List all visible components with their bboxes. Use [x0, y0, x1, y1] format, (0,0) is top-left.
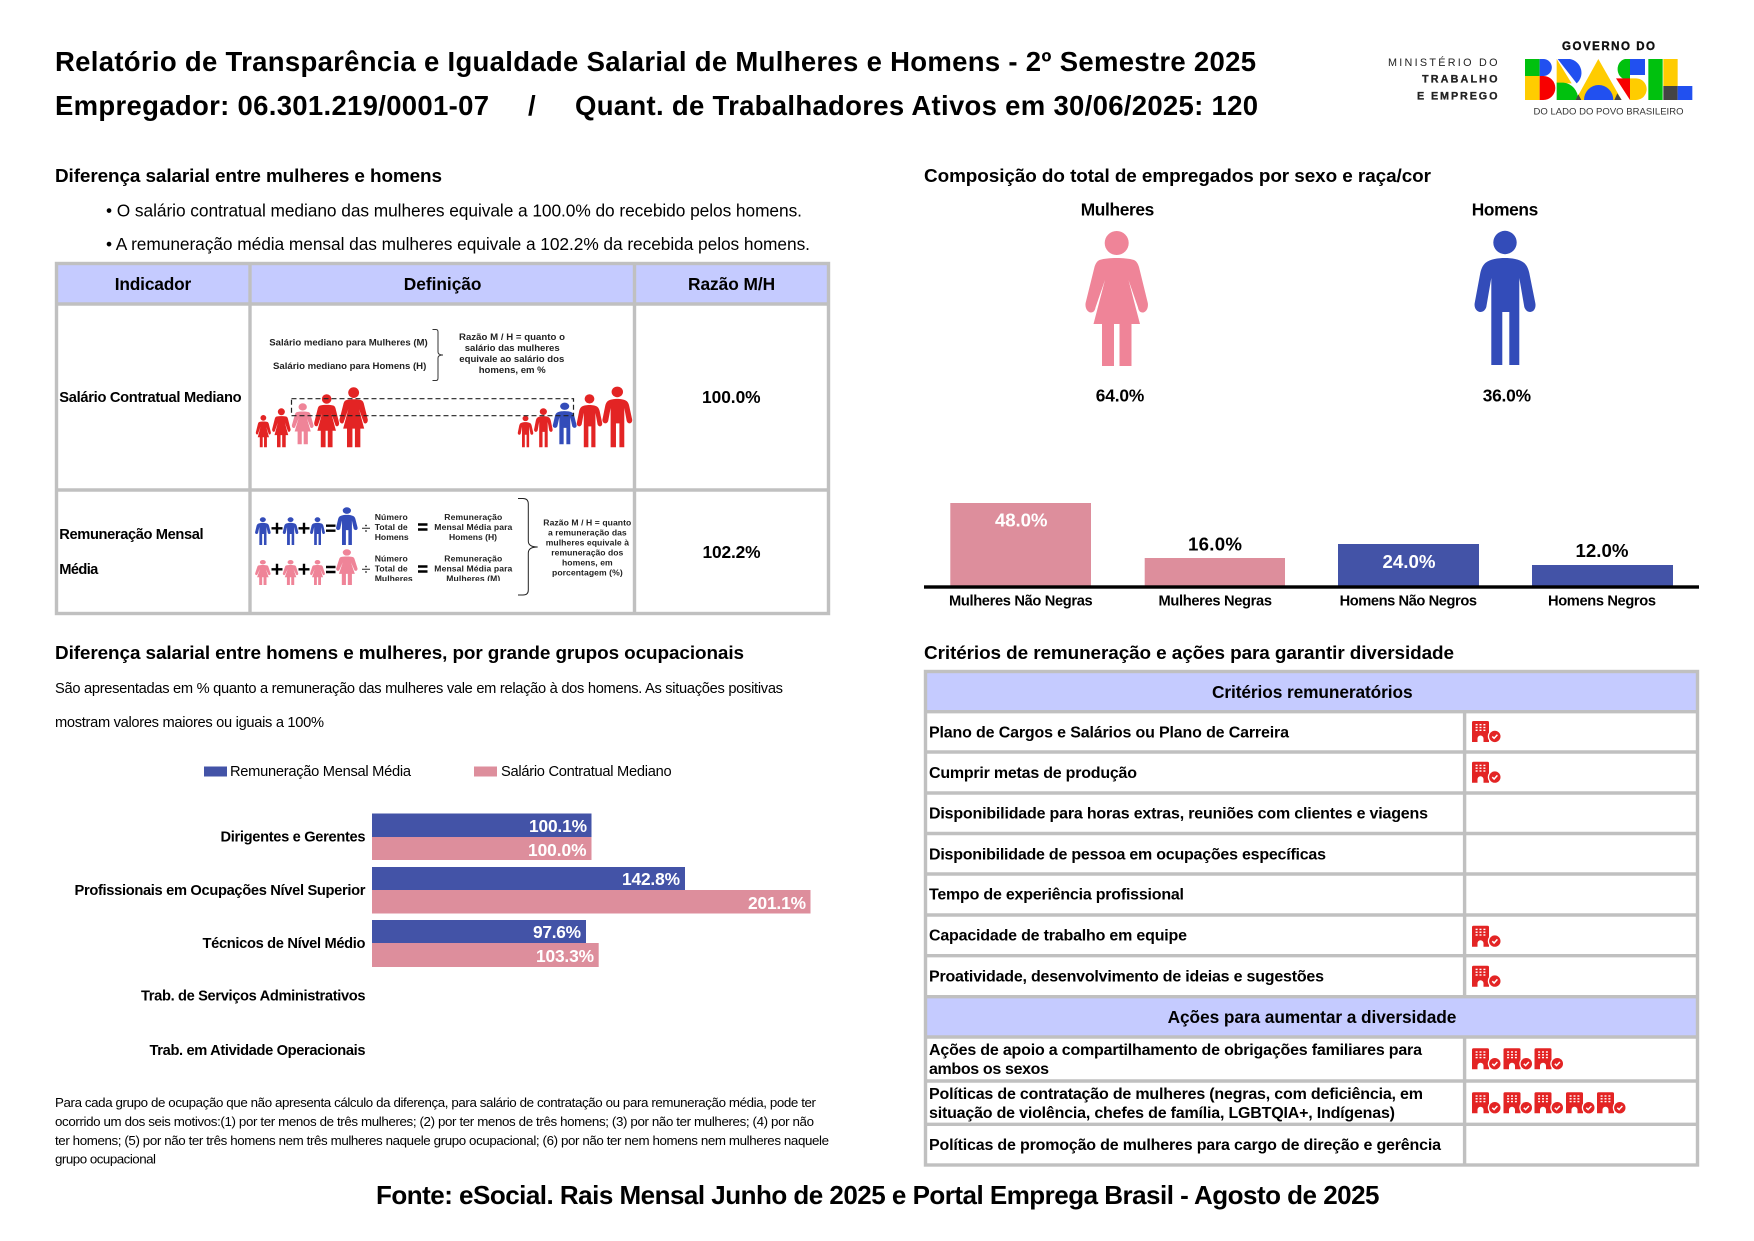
title — [55, 46, 1258, 121]
panel: composição — [924, 166, 1699, 610]
row: plano de cargos: Plano de Cargos e Salários ou Plano de Carreira — [929, 725, 1289, 742]
label: homens: Homens — [1472, 200, 1538, 220]
diagram: salário mediano: Salário mediano para Homens (H) — [273, 361, 426, 372]
diagram: salário mediano — [256, 330, 632, 447]
panel: grupos ocupacionais — [55, 643, 829, 1166]
diagram: remuneração média: Mensal Média para — [434, 564, 513, 574]
value: mulheres: 64.0% — [1096, 386, 1144, 406]
text: explicação: mostram valores maiores ou iguais a 100% — [55, 715, 324, 731]
label: mulheres: Mulheres — [1081, 200, 1154, 220]
row: horas extras: Disponibilidade para horas extras, reuniões com clientes e viagens — [929, 806, 1428, 822]
diagram: remuneração média: Número — [375, 554, 408, 564]
logo: governo do brasil — [1525, 41, 1692, 118]
bar chart: razão por ocupação: 100.0% — [528, 840, 586, 860]
diagram: salário mediano: Salário mediano para Mulheres (M) — [269, 338, 428, 349]
diagram: remuneração média: Homens (H) — [449, 532, 497, 542]
diagram: remuneração média: Número — [375, 512, 408, 522]
row: proatividade: Proatividade, desenvolvimento de ideias e sugestões — [929, 969, 1324, 986]
logo: governo do brasil: DO LADO DO POVO BRASILEIRO — [1534, 107, 1684, 118]
diagram: remuneração média: Total de — [375, 564, 408, 574]
bar chart: razão por ocupação: 97.6% — [533, 922, 581, 942]
bar chart: razão por ocupação: Profissionais em Ocupações Nível Superior — [74, 883, 366, 899]
diagram: remuneração média: Mulheres — [375, 574, 413, 584]
bar chart: razão por ocupação: 201.1% — [748, 893, 806, 913]
title: Empregador: 06.301.219/0001-07 — [55, 90, 489, 121]
bar chart: sexo e raça: Homens Negros — [1548, 594, 1656, 610]
bar chart: razão por ocupação: 100.1% — [529, 816, 587, 836]
heading: critérios: Critérios de remuneração e ações para garantir diversidade — [924, 643, 1454, 664]
row: metas — [929, 762, 1502, 784]
row: equipe — [929, 926, 1502, 948]
logo: ministério — [1388, 56, 1498, 102]
diagram: salário mediano: Razão M / H = quanto o — [459, 332, 565, 343]
diagram: remuneração média: porcentagem (%) — [552, 567, 623, 577]
row: metas: Cumprir metas de produção — [929, 765, 1137, 782]
diagram: remuneração média: Remuneração — [444, 554, 502, 564]
title: / — [528, 90, 536, 121]
diagram: remuneração média: mulheres equivale à — [546, 537, 629, 547]
diagram: remuneração média — [255, 498, 631, 595]
diagram: remuneração média: Remuneração — [444, 512, 502, 522]
row: salário contratual mediano: 100.0% — [702, 387, 761, 407]
text: nota de rodapé: grupo ocupacional — [55, 1151, 156, 1166]
panel: critérios e ações — [924, 643, 1698, 1165]
row: obrigações familiares — [929, 1042, 1564, 1078]
text: nota de rodapé: Para cada grupo de ocupação que não apresenta cálculo da diferença, para salário de contratação ou para remuneração média, pode ter — [55, 1095, 817, 1110]
diagram: remuneração média: a remuneração das — [548, 527, 627, 537]
bar chart: sexo e raça: Homens Não Negros — [1340, 594, 1477, 610]
title: Relatório de Transparência e Igualdade Salarial de Mulheres e Homens - 2º Semestre 2025 — [55, 46, 1256, 77]
table: razão M/H — [56, 263, 829, 614]
heading: diferença salarial: Diferença salarial entre mulheres e homens — [55, 166, 442, 187]
icon: mulher — [1085, 231, 1148, 366]
text: explicação — [55, 681, 783, 731]
table: critérios remuneratórios — [925, 672, 1698, 1165]
bar chart: razão por ocupação: 142.8% — [622, 869, 680, 889]
row: remuneração mensal média: Média — [59, 562, 99, 578]
table header: critérios: Critérios remuneratórios — [1212, 682, 1413, 702]
logo: ministério: TRABALHO — [1422, 74, 1498, 86]
bar chart: razão por ocupação: 103.3% — [536, 946, 594, 966]
diagram: remuneração média: Razão M / H = quanto — [543, 517, 631, 527]
bar chart: sexo e raça — [924, 503, 1699, 610]
panel: diferença salarial — [55, 166, 829, 614]
row: salário contratual mediano — [59, 387, 761, 407]
source line: Fonte: eSocial. Rais Mensal Junho de 2025 e Portal Emprega Brasil - Agosto de 2025 — [376, 1180, 1380, 1210]
row: políticas de contratação: situação de violência, chefes de família, LGBTQIA+, Indígenas) — [929, 1105, 1395, 1122]
row: obrigações familiares: ambos os sexos — [929, 1061, 1049, 1078]
logo: governo do brasil: GOVERNO DO — [1562, 41, 1655, 53]
row: promoção: Políticas de promoção de mulheres para cargo de direção e gerência — [929, 1137, 1441, 1154]
diagram: salário mediano: homens, em % — [479, 365, 546, 376]
diagram: salário mediano: equivale ao salário dos — [459, 354, 564, 365]
diagram: remuneração média: remuneração dos — [551, 547, 624, 557]
bar chart: razão por ocupação: Trab. de Serviços Administrativos — [141, 989, 366, 1005]
bar chart: sexo e raça: 24.0% — [1382, 551, 1436, 572]
table header: ações: Ações para aumentar a diversidade — [1168, 1007, 1457, 1027]
text: explicação: São apresentadas em % quanto a remuneração das mulheres vale em relação à dos homens. As situações positivas — [55, 681, 783, 697]
bar chart: sexo e raça: Mulheres Negras — [1158, 594, 1272, 610]
row: remuneração mensal média: 102.2% — [702, 542, 761, 562]
diagram: remuneração média: Homens — [375, 532, 409, 542]
icon: homem — [1475, 231, 1536, 365]
row: remuneração mensal média: Remuneração Mensal — [59, 527, 204, 543]
text: nota de rodapé: ocorrido um dos seis motivos:(1) por ter menos de três mulheres; (2) por ter menos de três homens; (3) por não ter mulheres; (4) por não — [55, 1114, 814, 1129]
row: remuneração mensal média — [59, 527, 761, 578]
row: obrigações familiares: Ações de apoio a compartilhamento de obrigações familiares para — [929, 1042, 1422, 1059]
value: homens: 36.0% — [1483, 386, 1531, 406]
text: nota de rodapé: ter homens; (5) por não ter três homens nem três mulheres naquele grupo ocupacional; (6) por não ter nem homens nem mulheres naquele — [55, 1133, 829, 1148]
heading: grupos ocupacionais: Diferença salarial entre homens e mulheres, por grande grupos ocupacionais — [55, 643, 744, 664]
row: políticas de contratação: Políticas de contratação de mulheres (negras, com deficiência, em — [929, 1086, 1423, 1103]
diagram: salário mediano: salário das mulheres — [465, 343, 560, 354]
bar chart: razão por ocupação: Dirigentes e Gerentes — [220, 830, 366, 846]
row: ocupações específicas: Disponibilidade de pessoa em ocupações específicas — [929, 846, 1326, 864]
table header — [115, 274, 775, 294]
logo: ministério: MINISTÉRIO DO — [1388, 56, 1498, 69]
bar chart: sexo e raça: 16.0% — [1188, 534, 1242, 555]
bar chart: sexo e raça: 48.0% — [995, 510, 1048, 531]
logo: ministério: E EMPREGO — [1417, 90, 1498, 102]
diagram: remuneração média: Mulheres (M) — [446, 574, 500, 584]
legend: Remuneração Mensal Média — [230, 764, 412, 780]
table header: Definição — [404, 274, 482, 294]
row: proatividade — [929, 966, 1502, 988]
text: nota de rodapé — [55, 1095, 829, 1166]
bar chart: sexo e raça: 12.0% — [1576, 540, 1629, 561]
legend — [204, 764, 672, 780]
table header: Razão M/H — [688, 274, 775, 294]
row: equipe: Capacidade de trabalho em equipe — [929, 928, 1187, 945]
row: políticas de contratação — [929, 1086, 1627, 1122]
diagram: remuneração média: homens, em — [562, 557, 613, 567]
row: experiência: Tempo de experiência profissional — [929, 886, 1184, 904]
bar chart: razão por ocupação — [74, 814, 810, 1059]
legend: Salário Contratual Mediano — [501, 764, 672, 780]
bullet: salário contratual: • O salário contratual mediano das mulheres equivale a 100.0% do recebido pelos homens. — [106, 201, 802, 221]
bar chart: sexo e raça: Mulheres Não Negras — [949, 594, 1093, 610]
bar chart: razão por ocupação: Trab. em Atividade Operacionais — [150, 1043, 366, 1059]
title: Quant. de Trabalhadores Ativos em 30/06/2025: 120 — [575, 90, 1258, 121]
row: salário contratual mediano: Salário Contratual Mediano — [59, 390, 242, 406]
diagram: remuneração média: Total de — [375, 522, 408, 532]
table header: Indicador — [115, 274, 192, 294]
heading: composição: Composição do total de empregados por sexo e raça/cor — [924, 166, 1432, 187]
diagram: remuneração média: Mensal Média para — [434, 522, 513, 532]
bullet: remuneração média: • A remuneração média mensal das mulheres equivale a 102.2% da recebida pelos homens. — [106, 234, 810, 254]
bar chart: razão por ocupação: Técnicos de Nível Médio — [202, 936, 366, 952]
row: plano de cargos — [929, 721, 1502, 743]
